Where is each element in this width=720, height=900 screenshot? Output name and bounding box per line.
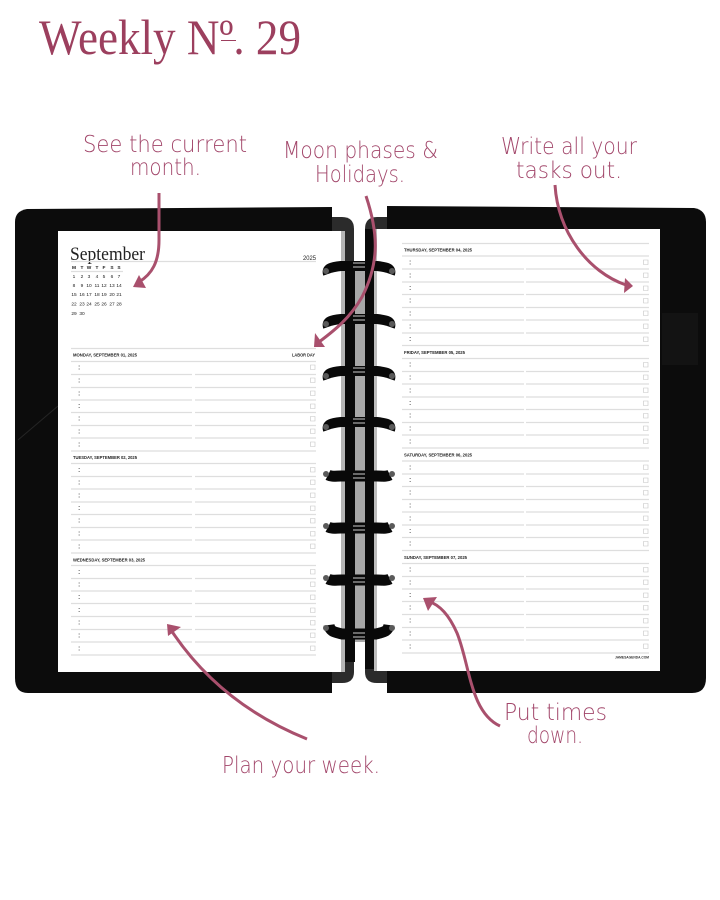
mini calendar: 1 bbox=[73, 274, 76, 280]
Saturday block: SATURDAY, SEPTEMBER 06, 2025 bbox=[404, 452, 472, 458]
mini calendar: 21 bbox=[116, 292, 122, 298]
left cover bbox=[15, 207, 332, 693]
Wednesday block: ::::::: bbox=[78, 569, 80, 652]
Friday block: FRIDAY, SEPTEMBER 05, 2025 bbox=[404, 350, 465, 355]
mini calendar: 29 bbox=[71, 311, 77, 317]
label: write all your tasks out: Write all your bbox=[501, 134, 637, 160]
label: moon phases and holidays: Moon phases & bbox=[283, 138, 438, 164]
Friday block: ::::::: bbox=[409, 362, 411, 446]
right page bbox=[377, 229, 660, 671]
arrow: to week plan bbox=[167, 624, 307, 739]
label: put times down: down. bbox=[527, 723, 583, 749]
label: see the current month: See the current bbox=[83, 132, 247, 158]
Monday block: LABOR DAY bbox=[292, 352, 315, 358]
mini calendar: 11 bbox=[95, 283, 100, 289]
Thursday block: THURSDAY, SEPTEMBER 04, 2025 bbox=[404, 248, 472, 252]
mini calendar: 25 bbox=[94, 302, 100, 308]
mini calendar: 15 bbox=[71, 292, 77, 298]
mini calendar: 24 bbox=[86, 302, 92, 308]
arrow: to holiday bbox=[314, 196, 375, 347]
mini calendar: 28 bbox=[116, 302, 122, 308]
mini calendar: 22 bbox=[71, 302, 77, 308]
binder rings bbox=[323, 263, 395, 637]
spine flaps bbox=[325, 217, 395, 683]
month heading: September bbox=[70, 244, 146, 265]
year: 2025 bbox=[303, 255, 316, 262]
title: Weekly Nº. 29 bbox=[39, 9, 301, 65]
mini calendar: T bbox=[81, 265, 84, 271]
mini calendar: T bbox=[96, 265, 99, 271]
Tuesday block bbox=[71, 455, 316, 553]
Tuesday block: ::::::: bbox=[78, 467, 80, 550]
mini calendar: 12 bbox=[101, 283, 107, 289]
Thursday block bbox=[402, 244, 649, 346]
mini calendar: 2 bbox=[81, 274, 84, 280]
label: put times down: Put times bbox=[504, 700, 607, 726]
mini calendar: 26 bbox=[101, 302, 107, 308]
label: write all your tasks out bbox=[501, 134, 637, 184]
Sunday block bbox=[402, 555, 649, 653]
Wednesday block bbox=[71, 558, 316, 655]
mini calendar: 14 bbox=[116, 283, 122, 289]
label: moon phases and holidays bbox=[283, 138, 438, 188]
label: see the current month bbox=[83, 132, 247, 181]
Monday block bbox=[71, 348, 316, 451]
mini calendar: S bbox=[110, 265, 114, 271]
mini calendar: 10 bbox=[86, 283, 92, 289]
mini calendar: M bbox=[72, 265, 76, 271]
right cover bbox=[387, 206, 706, 693]
mini calendar bbox=[71, 265, 122, 317]
mini calendar: 19 bbox=[101, 292, 107, 298]
mini calendar: 4 bbox=[96, 274, 99, 280]
mini calendar: 23 bbox=[79, 302, 85, 308]
mini calendar: 7 bbox=[118, 274, 121, 280]
mini calendar: 20 bbox=[109, 292, 115, 298]
left page bbox=[58, 231, 341, 672]
Saturday block bbox=[402, 452, 649, 550]
Tuesday block: TUESDAY, SEPTEMBER 02, 2025 bbox=[73, 455, 137, 460]
mini calendar: S bbox=[117, 265, 121, 271]
mini calendar: 18 bbox=[94, 292, 100, 298]
Saturday block: ::::::: bbox=[409, 464, 411, 548]
mini calendar: 6 bbox=[111, 274, 114, 280]
label: put times down bbox=[504, 700, 607, 749]
Friday block bbox=[402, 350, 649, 448]
mini calendar: 16 bbox=[79, 292, 85, 298]
Sunday block: SUNDAY, SEPTEMBER 07, 2025 bbox=[404, 555, 467, 560]
Sunday block: ::::::: bbox=[409, 566, 411, 650]
mini calendar: 17 bbox=[86, 292, 92, 298]
mini calendar: 27 bbox=[109, 302, 115, 308]
Monday block: MONDAY, SEPTEMBER 01, 2025 bbox=[73, 352, 137, 358]
mini calendar: 9 bbox=[81, 283, 84, 289]
arrow: to calendar bbox=[133, 193, 159, 288]
label: write all your tasks out: tasks out. bbox=[516, 158, 622, 184]
label: moon phases and holidays: Holidays. bbox=[315, 162, 405, 188]
mini calendar: W bbox=[87, 265, 92, 271]
mini calendar: 13 bbox=[109, 283, 115, 289]
label: see the current month: month. bbox=[130, 155, 201, 181]
label: plan your week: Plan your week. bbox=[222, 753, 380, 779]
mini calendar: 30 bbox=[79, 311, 85, 317]
mini calendar: 8 bbox=[73, 283, 76, 289]
mini calendar: F bbox=[103, 265, 106, 271]
Wednesday block: WEDNESDAY, SEPTEMBER 03, 2025 bbox=[73, 558, 145, 562]
Monday block: ::::::: bbox=[78, 364, 80, 448]
Thursday block: ::::::: bbox=[409, 260, 411, 343]
arrow: to times bbox=[423, 597, 500, 726]
arrow: to tasks bbox=[555, 185, 633, 293]
mini calendar: 5 bbox=[103, 274, 106, 280]
mini calendar: 3 bbox=[88, 274, 91, 280]
footer url: JAMESAGENDA.COM bbox=[615, 654, 650, 660]
binder spine bbox=[340, 229, 377, 672]
